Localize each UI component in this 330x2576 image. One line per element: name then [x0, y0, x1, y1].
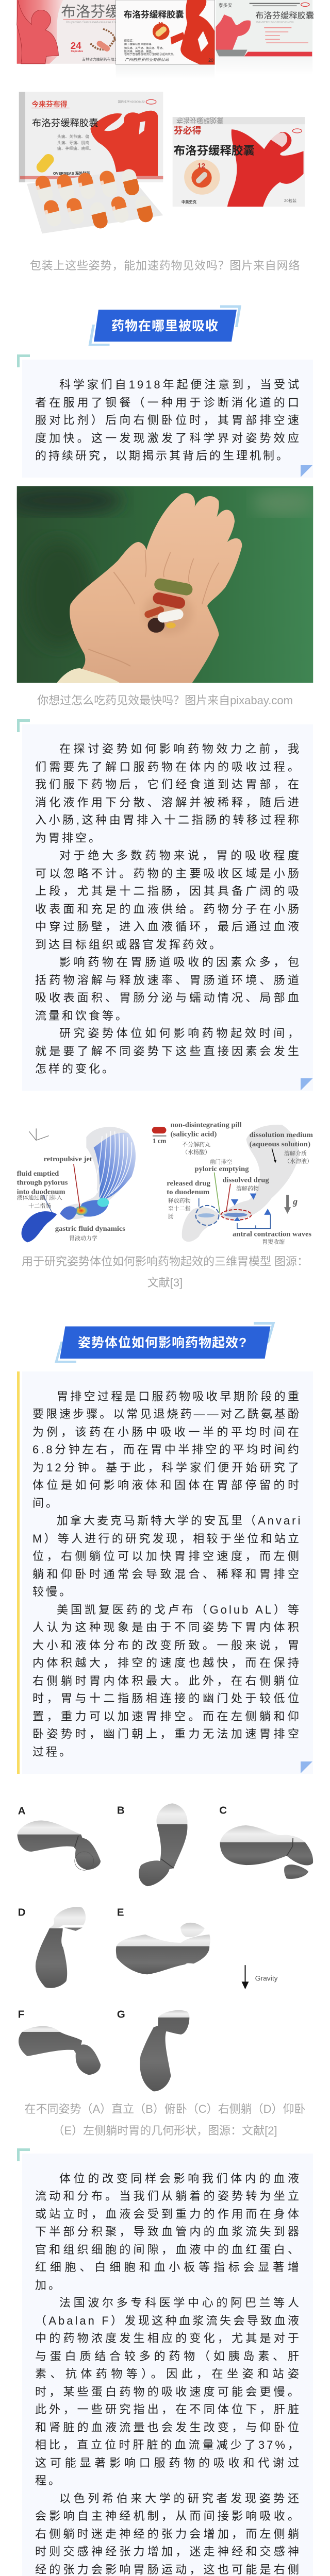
body text: 6.8分钟左右，而在胃中半排空的平均时间约 — [32, 1443, 301, 1456]
body text — [32, 1390, 302, 1758]
body text: 素、抗体药物等）。因此，在坐姿和站姿 — [35, 2367, 301, 2380]
body text: 体位是如何影响液体和固体在胃部停留的时 — [32, 1479, 301, 1492]
package 5: 20粒装 — [284, 198, 296, 203]
stomach D: supine: D — [18, 1907, 25, 1919]
body text: 过程。 — [32, 1745, 73, 1758]
package 3: 布洛芬缓释胶囊 — [255, 11, 314, 20]
package 4 — [19, 92, 163, 182]
body text: 人认为这种现象是由于不同姿势下胃内体积 — [32, 1621, 301, 1634]
left panel: gastric fluid dynamics: 胃液动力学 — [69, 1234, 97, 1242]
right panel: dissolution model: 不分解药丸 — [182, 1141, 210, 1148]
body text: 中穿过肠壁，进入血液循环，最后通过血液 — [35, 920, 301, 933]
right panel: dissolution model: dissolved drug — [222, 1176, 269, 1183]
stomach C: right lateral — [219, 1805, 313, 1879]
blue triangle mark — [300, 1761, 312, 1773]
body text: 下半部分积聚，导致血管内的血浆流失到器 — [35, 2225, 301, 2238]
body text: 科学家们自1918年起便注意到，当受试 — [59, 378, 301, 391]
left panel: gastric fluid dynamics: fluid emptied — [17, 1170, 59, 1177]
body text: 度加快。这一发现激发了科学界对姿势效应 — [35, 432, 301, 444]
body text: 经的张力会影响胃肠运动，这也可能是右侧 — [35, 2563, 301, 2576]
package 5: 12 — [197, 162, 206, 170]
package 5: 布洛芬缓释胶囊 — [176, 116, 223, 124]
stomach G — [117, 2009, 189, 2091]
body text: 研究姿势体位如何影响药物起效时间， — [59, 1027, 301, 1040]
right panel: dissolution model: pyloric emptying — [195, 1165, 249, 1173]
package 4: 痛、神经痛、痛经。 — [57, 146, 93, 151]
panel: gastric emptying studies — [17, 1371, 312, 1774]
stomach B: prone: B — [117, 1805, 125, 1816]
package 1: Ibuprofen Sustained-release Capsules — [67, 21, 127, 24]
package 1 — [17, 0, 164, 64]
yellow side bar — [16, 1371, 20, 1773]
package 3: 泰多安 — [219, 3, 233, 8]
pills — [143, 578, 193, 633]
package 2 — [116, 0, 214, 79]
heading: how posture affects onset — [55, 1322, 275, 1363]
product photo: ibuprofen capsule packages — [16, 0, 314, 234]
body text: 括药物溶解与释放速率、胃肠道环境、肠道 — [35, 974, 301, 987]
package 5: 中美史克 — [182, 200, 197, 205]
package 5: 布洛芬缓释胶囊 — [174, 144, 255, 157]
package 2: 12 — [158, 22, 163, 26]
body text: 躺和仰卧时通常会导致混合、稀释和胃排空 — [32, 1567, 301, 1581]
right panel: dissolution model — [152, 1121, 314, 1245]
body text: 这可能显著影响口服药物的吸收和代谢过 — [35, 2456, 301, 2469]
package 2: 如头痛、关节痛、偏头痛、牙痛、 — [124, 46, 165, 50]
panel background — [22, 360, 313, 478]
package 4: OVERSEAS 海外制药 — [53, 171, 90, 176]
right panel: dissolution model: 溶解介质 — [284, 1150, 307, 1157]
caption: stomach model: 用于研究姿势体位如何影响药物起效的三维胃模型 图源： — [22, 1255, 308, 1267]
package 2: 肌肉痛、神经痛、痛经。 — [124, 49, 154, 53]
package 5: 芬必得 — [174, 126, 202, 136]
body text: 流量和饮食等。 — [35, 1009, 129, 1022]
body text: 加拿大麦克马斯特大学的安瓦里（Anvari — [57, 1514, 302, 1527]
caption: package photo: 包装上这些姿势，能加速药物见效吗？图片来自网络 — [30, 259, 300, 272]
body text: 服对比剂）后向右侧卧位时，其胃部排空速 — [35, 414, 301, 427]
figure: 3D stomach model — [16, 1121, 314, 1245]
blue triangle mark — [300, 1078, 312, 1091]
body text: 程。 — [35, 2474, 62, 2487]
left panel: gastric fluid dynamics: 液体通过幽门排入 — [17, 1194, 62, 1201]
body text: 与蛋白质结合较多的药物（如胰岛素、肝 — [35, 2350, 301, 2363]
body text: 官和组织细胞的间隙，血液中的血红蛋白、 — [35, 2243, 301, 2256]
body text — [35, 378, 301, 462]
panel background — [22, 2154, 313, 2576]
arrow: gravity direction — [242, 1965, 278, 1989]
right panel: dissolution model: 幽门排空 — [209, 1158, 232, 1165]
axes — [29, 1128, 49, 1140]
caption: postures — [24, 2103, 306, 2137]
body text: 或站立时，血液会受到重力的作用而在身体 — [35, 2208, 301, 2221]
teal corner mark — [16, 354, 30, 367]
body text: 美国凯复医药的戈卢布（Golub AL）等 — [57, 1603, 301, 1616]
body text: 大小和液体分布的改变所致。一般来说，胃 — [32, 1638, 301, 1652]
body text: 加。 — [35, 2279, 62, 2292]
package 1: 布洛芬缓释胶囊 — [61, 4, 164, 20]
body text: M）等人进行的研究发现，相较于坐位和站立 — [32, 1532, 301, 1545]
package 2: 布洛芬缓释胶囊 — [124, 9, 184, 20]
body text: 为例，该药在小肠中吸收一半的平均时间在 — [32, 1425, 301, 1438]
panel background — [22, 724, 313, 1091]
body text: 红细胞、白细胞和血小板等指标会显著增 — [35, 2261, 301, 2274]
blister pack — [27, 167, 163, 233]
package 5 — [173, 116, 305, 207]
heading: where drugs are absorbed — [89, 305, 241, 346]
body text: 时，某些蛋白药物的吸收速度可能会更慢。 — [35, 2385, 301, 2398]
blue triangle mark — [300, 465, 312, 477]
body text: 可以忽略不计。药物的主要吸收区域是小肠 — [35, 867, 301, 880]
body text: 到达目标组织或器官发挥药效。 — [35, 938, 223, 951]
caption: stomach model: 文献[3] — [147, 1276, 183, 1289]
teal corner mark — [16, 2148, 30, 2161]
stomach F: F — [18, 2009, 24, 2021]
caption: postures: （E）左侧躺时胃的几何形状，图源：文献[2] — [53, 2124, 277, 2137]
right panel: dissolution model: 溶解药物 — [236, 1185, 259, 1192]
arrow: gravity direction: Gravity — [255, 1974, 278, 1982]
right panel: dissolution model: （水杨酸） — [182, 1148, 210, 1156]
body text: 影响药物在胃肠道吸收的因素众多，包 — [59, 956, 301, 969]
left panel: gastric fluid dynamics: into duodenum — [17, 1188, 65, 1195]
right panel: dissolution model: g — [292, 1196, 298, 1207]
stomach A: upright — [17, 1805, 101, 1870]
body text: （Abalan F）发现这种血浆流失会导致血液 — [35, 2314, 301, 2327]
body text: 们需要先了解口服药物在体内的吸收过程。 — [35, 760, 301, 773]
stomach F — [18, 2009, 101, 2075]
right panel: dissolution model: 至十二指 — [168, 1205, 191, 1212]
body text: 入小肠,这种由胃排入十二指肠的转移过程称 — [35, 814, 301, 826]
body text: 为12分钟。基于此，科学家们便开始研究了 — [32, 1461, 301, 1473]
left panel: gastric fluid dynamics — [17, 1127, 136, 1242]
panel: blood flow and nerves — [17, 2148, 301, 2576]
package 2: 适应症： — [124, 38, 135, 42]
stomach D: supine — [18, 1907, 86, 1988]
body text: 就是要了解不同姿势下这些直接因素会发生 — [35, 1045, 301, 1058]
package 4: 布洛芬缓释胶囊 — [32, 118, 98, 128]
right panel: dissolution model: antral contraction waves — [233, 1230, 312, 1238]
caption: stomach model — [22, 1255, 308, 1289]
body text: 此外，一些研究指出，在不同体位下，肝脏 — [35, 2403, 301, 2416]
body text: 法国波尔多专科医学中心的阿巴兰等人 — [59, 2296, 301, 2309]
body text: 以色列希伯来大学的研究者发现姿势还 — [59, 2492, 301, 2505]
heading: how posture affects onset: 姿势体位如何影响药物起效? — [78, 1335, 247, 1350]
body text: 和肾脏的血液流量也会发生改变，与仰卧位 — [35, 2421, 301, 2434]
stomach B: prone — [117, 1803, 188, 1886]
left panel: gastric fluid dynamics: through pylorus — [17, 1179, 68, 1187]
body text: 流动和分布。当我们从躺着的姿势转为坐立 — [35, 2190, 301, 2202]
photo: hand holding pills — [16, 486, 314, 683]
body text — [35, 2172, 301, 2576]
panel: intro text — [17, 354, 312, 477]
body text: 置，重力可以加速胃排空。而在左侧躺和仰 — [32, 1709, 301, 1723]
right panel: dissolution model: (aqueous solution) — [250, 1140, 310, 1148]
body text: 胃排空过程是口服药物吸收早期阶段的重 — [57, 1390, 301, 1402]
left panel: gastric fluid dynamics: 十二指肠 — [28, 1202, 51, 1209]
left panel: gastric fluid dynamics: retropulsive jet — [43, 1155, 92, 1163]
caption: hand photo: 你想过怎么吃药见效最快吗？图片来自pixabay.com — [37, 694, 293, 707]
right panel: dissolution model: 胃窦收缩 — [262, 1238, 285, 1245]
package 2: 广州柏赛罗药业有限公司 — [125, 58, 170, 62]
right panel: dissolution model: (salicylic acid) — [171, 1130, 217, 1139]
body text: 的持续研究，以期揭示其背后的生理机制。 — [35, 449, 290, 462]
stomach E: left lateral: E — [117, 1907, 124, 1919]
package 2: 也用于普通感冒或流行性感冒引起的发热。 — [124, 52, 176, 56]
figure: stomach geometry in different postures — [18, 1803, 314, 2092]
body text: 消化液作用下分散、溶解并被稀释，随后进 — [35, 796, 301, 809]
body text: 要限速步骤。以常见退烧药——对乙酰氨基酚 — [32, 1408, 301, 1420]
panel background — [22, 1371, 313, 1773]
package 1: Capsules — [71, 50, 83, 53]
body text: 对于绝大多数药物来说，胃的吸收程度 — [59, 849, 301, 862]
body text: 者在服用了钡餐（一种用于诊断消化道的口 — [35, 396, 301, 409]
right panel: dissolution model: released drug — [167, 1179, 210, 1187]
left panel: gastric fluid dynamics: gastric fluid dynamics — [55, 1225, 126, 1232]
body text: 中的药物浓度发生相应的变化，尤其是对于 — [35, 2332, 301, 2345]
right panel: dissolution model: （水溶液） — [284, 1158, 312, 1164]
body text: 时，胃与十二指肠相连接的幽门处于较低位 — [32, 1692, 301, 1705]
stomach A: upright: A — [18, 1805, 26, 1817]
body text — [35, 742, 301, 1075]
package 1: 吉林省力胜制药有限公司 — [82, 57, 122, 61]
package 4: 国药准字H20000422 — [118, 100, 145, 104]
heading: where drugs are absorbed: 药物在哪里被吸收 — [111, 319, 219, 333]
body text: 吸收表面积、胃肠分泌与蠕动情况、局部血 — [35, 991, 301, 1004]
body text: 相比，直立位时肝脏的血流量减少了37%， — [35, 2438, 301, 2451]
body text: 卧姿势时，幽门朝上，重力无法加速胃排空 — [32, 1727, 301, 1740]
body text: 上段，尤其是十二指肠，因其具备广阔的吸 — [35, 885, 301, 897]
body text: 时则交感神经张力增加，迷走神经和交感神 — [35, 2545, 301, 2558]
body text: 右侧躺时迷走神经的张力会增加，而左侧躺 — [35, 2528, 301, 2540]
package 4: 头痛、牙痛、肌肉 — [57, 140, 89, 145]
body text: 间。 — [32, 1496, 59, 1510]
package 2: 20 — [208, 58, 213, 63]
stomach E: left lateral — [116, 1907, 210, 1974]
body text: 会影响自主神经机制，从而间接影响吸收。 — [35, 2510, 301, 2522]
right panel: dissolution model: 释放药物 — [168, 1197, 191, 1204]
body text: 内体积越大，排空的速度也越快，而在保持 — [32, 1656, 301, 1669]
right panel: dissolution model: dissolution medium — [250, 1131, 314, 1139]
panel: absorption process — [17, 719, 312, 1090]
body text: 怎样的变化。 — [35, 1062, 116, 1075]
right panel: dissolution model: 1 cm — [153, 1137, 167, 1145]
teal corner mark — [16, 719, 30, 732]
body text: 体位的改变同样会影响我们体内的血液 — [59, 2172, 301, 2185]
body text: 右侧躺时胃内体积最大。此外，在右侧躺位 — [32, 1674, 301, 1687]
icon: hand — [61, 493, 242, 684]
body text: 为胃排空。 — [35, 832, 102, 844]
body text: 较慢。 — [32, 1585, 73, 1598]
right panel: dissolution model: 肠 — [168, 1213, 174, 1219]
body text: 我们服下药物后，它们经食道到达胃部，在 — [35, 778, 301, 791]
stomach G: G — [117, 2009, 125, 2021]
package 3: BULUOFENHUANSHIJIAONANG — [256, 21, 294, 24]
package 4: 头痛、关节痛、偏 — [57, 134, 89, 139]
body text: 收表面和充足的血液供给。药物分子在小肠 — [35, 903, 301, 916]
caption: postures: 在不同姿势（A）直立（B）俯卧（C）右侧躺（D）仰卧 — [24, 2103, 306, 2115]
body text: 位，右侧躺位可以加快胃排空速度，而左侧 — [32, 1550, 301, 1563]
right panel: dissolution model: to duodenum — [167, 1188, 210, 1196]
package 1: 24 — [71, 40, 81, 51]
package 2: 用于缓解轻至中度疼痛 — [124, 42, 152, 46]
right panel: dissolution model: non-disintegrating pill — [171, 1121, 242, 1129]
body text: 在探讨姿势如何影响药物效力之前，我 — [59, 742, 301, 755]
package 4: 今来芬布得 — [31, 100, 68, 108]
stomach C: right lateral: C — [219, 1805, 227, 1816]
package 3 — [216, 0, 314, 75]
